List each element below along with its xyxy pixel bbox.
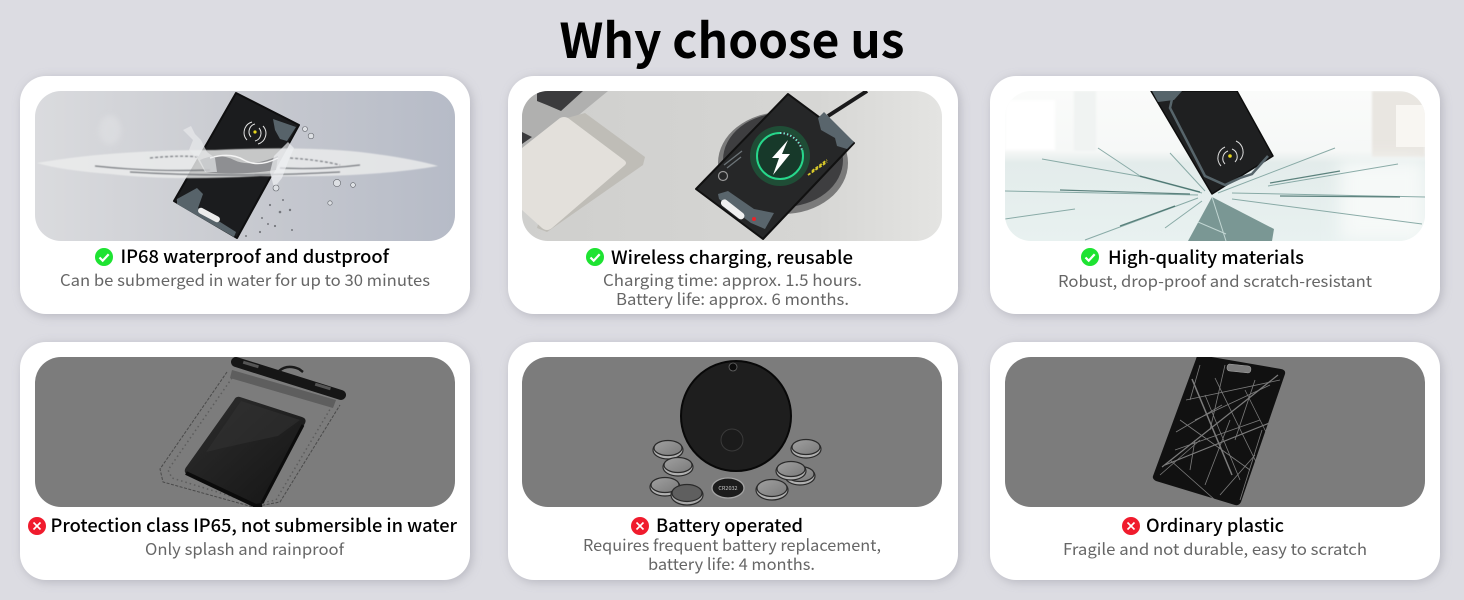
description: Robust, drop-proof and scratch-resistant [1058,268,1372,292]
panel: IP65 pouch [20,342,470,580]
heading: Wireless charging, reusable [611,244,853,270]
description: Only splash and rainproof [145,536,345,560]
description: Can be submerged in water for up to 30 minutes [60,267,430,291]
description [583,532,881,575]
description: Fragile and not durable, easy to scratch [1063,536,1367,560]
icon: green check [586,248,604,266]
heading: Battery operated [656,512,803,538]
icon: red cross [28,517,46,535]
image: tracker with coin batteries: CR2032 [718,484,738,492]
icon: green check [95,248,113,266]
icon: red cross [631,517,649,535]
description [603,267,862,310]
heading: Protection class IP65, not submersible in water [50,512,458,538]
heading: High-quality materials [1108,244,1304,270]
panel: battery operated [508,342,958,580]
icon: green check [1081,248,1099,266]
image: scratched plastic card [1005,355,1425,507]
panel: wireless charging [508,76,958,314]
heading: IP68 waterproof and dustproof [120,243,390,269]
heading: Ordinary plastic [1146,512,1284,538]
image: device in waterproof pouch [35,357,455,507]
image: card on wireless charger [522,91,942,241]
icon: red cross [1122,517,1140,535]
description: Battery life: approx. 6 months. [616,286,849,310]
image: tracker with coin batteries [522,357,942,507]
description: Requires frequent battery replacement, [583,532,881,556]
image: card splashing in water [35,91,455,241]
image: card cracking glass [1005,91,1425,241]
panel: ordinary plastic [990,342,1440,580]
panel: high-quality materials [990,76,1440,314]
description: Charging time: approx. 1.5 hours. [603,267,862,291]
panel: IP68 waterproof [20,76,470,314]
title: Why choose us [560,2,904,72]
description: battery life: 4 months. [648,551,815,575]
